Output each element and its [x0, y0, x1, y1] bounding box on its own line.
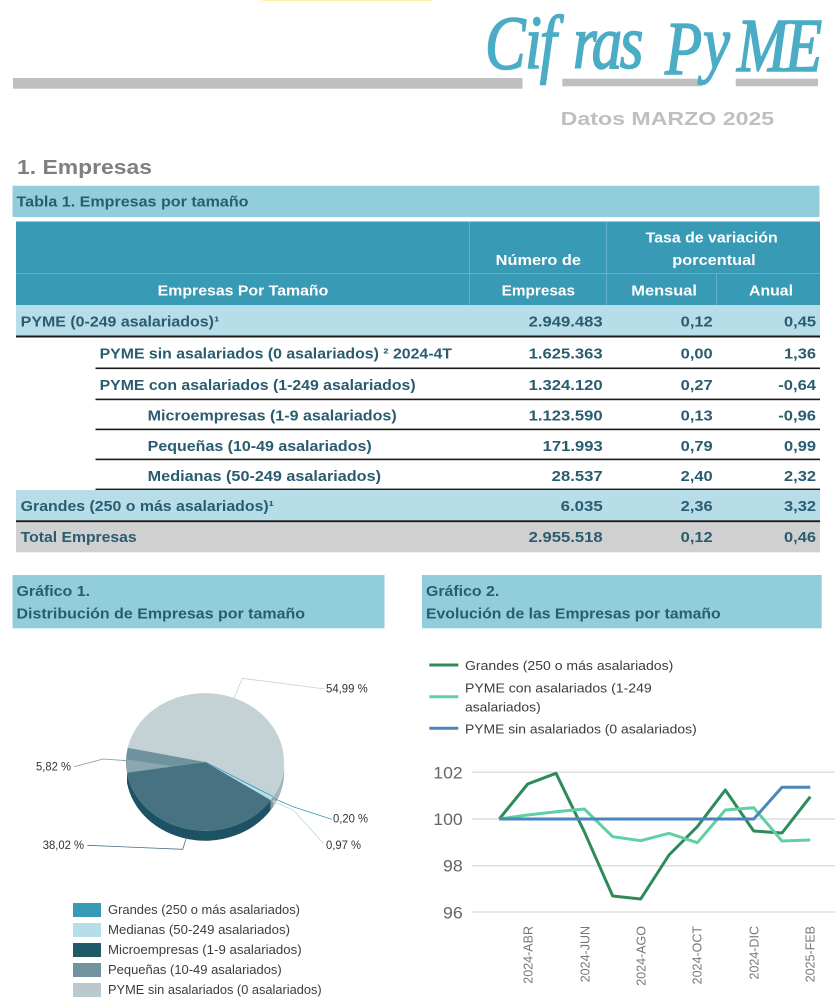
- row: PYME sin asalariados: 0,00: [681, 346, 713, 362]
- chart 2 heading: [422, 575, 822, 628]
- pie legend: Medianas (50-249 asalariados): [108, 923, 290, 937]
- row: PYME: 0,12: [681, 314, 713, 330]
- pie legend: PYME sin asalariados (0 asalariados): [108, 983, 322, 997]
- row: Pequeñas: 0,79: [681, 439, 713, 455]
- slice: Medianas: [205, 762, 273, 800]
- chart 1 heading: [12, 575, 384, 628]
- y axis labels: 102: [433, 763, 463, 782]
- table header: porcentual: [672, 253, 756, 269]
- table header: Anual: [749, 284, 793, 300]
- row: PYME: 2.949.483: [529, 314, 603, 330]
- row: Pequeñas: 0,99: [784, 439, 816, 455]
- pie depth: [127, 765, 284, 841]
- table header: Empresas: [502, 284, 575, 300]
- row: Medianas: 2,32: [784, 469, 816, 485]
- section heading: 1. Empresas: [17, 156, 152, 179]
- pie chart: [36, 678, 368, 852]
- pie labels: 0,97 %: [326, 840, 361, 852]
- slice: Pequeñas: [126, 748, 205, 773]
- row: Medianas: Medianas (50-249 asalariados): [148, 469, 381, 485]
- header: gray bars: [13, 78, 818, 89]
- table 1: [16, 222, 820, 552]
- chart 1 heading: Gráfico 1.: [16, 584, 90, 600]
- line: PYME con asalariados: [499, 808, 810, 843]
- row: Total: 2.955.518: [529, 530, 603, 546]
- x axis labels: 2024-AGO: [635, 926, 649, 986]
- table header: [16, 222, 820, 305]
- row: PYME con asalariados: 0,27: [681, 378, 713, 394]
- row: Total: 0,46: [784, 530, 816, 546]
- x axis labels: 2024-OCT: [691, 926, 705, 984]
- line chart legend: PYME con asalariados (1-249: [465, 681, 652, 695]
- row: Microempresas: -0,96: [778, 409, 816, 425]
- table title band: Tabla 1. Empresas por tamaño: [16, 195, 249, 211]
- row: Microempresas: [96, 409, 820, 430]
- pie labels: [36, 684, 368, 852]
- row: Total: 0,12: [681, 530, 713, 546]
- row: PYME con asalariados: PYME con asalariados (1-249 asalariados): [100, 378, 416, 394]
- x axis labels: 2025-FEB: [803, 926, 817, 982]
- row: Grandes: 6.035: [561, 499, 603, 515]
- title: Cifras PyME: Cifras PyME: [485, 1, 822, 91]
- leader lines: [74, 678, 332, 849]
- row: Pequeñas: [96, 439, 820, 460]
- pie labels: 38,02 %: [43, 840, 84, 852]
- row: Medianas: [96, 469, 820, 490]
- row: PYME: 0,45: [784, 314, 816, 330]
- row: Microempresas: 0,13: [681, 409, 713, 425]
- pie legend: [73, 903, 322, 997]
- x axis labels: [522, 926, 817, 986]
- row: PYME sin asalariados: PYME sin asalariados (0 asalariados) ² 2024-4T: [100, 346, 452, 362]
- table header: Empresas Por Tamaño: [158, 284, 328, 300]
- row: Microempresas: 1.123.590: [529, 409, 603, 425]
- line chart legend: Grandes (250 o más asalariados): [465, 659, 673, 673]
- y axis labels: 100: [433, 810, 463, 829]
- table title band: [12, 186, 820, 217]
- line chart legend: asalariados): [465, 701, 541, 715]
- subtitle: date: Datos MARZO 2025: [561, 108, 774, 129]
- table header: Mensual: [631, 284, 697, 300]
- line chart legend: PYME sin asalariados (0 asalariados): [465, 722, 697, 736]
- pie labels: 5,82 %: [36, 762, 71, 774]
- row: Total: Total Empresas: [21, 530, 137, 546]
- chart 1 heading: Distribución de Empresas por tamaño: [16, 606, 305, 622]
- x axis labels: 2024-DIC: [747, 926, 761, 980]
- row: Total: [16, 522, 820, 552]
- slice: Microempresas: [127, 762, 271, 831]
- line: Grandes: [499, 773, 810, 899]
- y axis labels: [433, 763, 463, 922]
- row: PYME: [16, 305, 820, 338]
- row: Pequeñas: 171.993: [543, 439, 603, 455]
- pie legend: Grandes (250 o más asalariados): [108, 903, 300, 917]
- row: Medianas: 28.537: [552, 469, 603, 485]
- row: Microempresas: Microempresas (1-9 asalariados): [148, 409, 397, 425]
- row: PYME con asalariados: 1.324.120: [529, 378, 603, 394]
- row: Grandes: 3,32: [784, 499, 816, 515]
- row: Grandes: 2,36: [681, 499, 713, 515]
- slice: Pequeñas highlight: [127, 760, 172, 773]
- pie labels: 0,20 %: [333, 814, 368, 826]
- row: PYME con asalariados: -0,64: [778, 378, 816, 394]
- row: PYME sin asalariados: 1.625.363: [529, 346, 603, 362]
- pie legend: Pequeñas (10-49 asalariados): [108, 963, 282, 977]
- row: Pequeñas: Pequeñas (10-49 asalariados): [148, 439, 372, 455]
- x axis labels: 2024-ABR: [522, 926, 536, 984]
- row: Grandes: [16, 490, 820, 522]
- pie legend: Microempresas (1-9 asalariados): [108, 943, 302, 957]
- line: PYME sin asalariados: [499, 787, 810, 819]
- row: PYME sin asalariados: 1,36: [784, 346, 816, 362]
- pie labels: 54,99 %: [326, 684, 368, 696]
- line chart: [433, 763, 835, 986]
- slice: PYME sin asalariados: [128, 693, 284, 797]
- line chart legend: [429, 659, 697, 736]
- x axis labels: 2024-JUN: [578, 926, 592, 982]
- slice: Grandes: [205, 762, 273, 797]
- row: PYME con asalariados: [96, 378, 820, 400]
- y axis labels: 98: [443, 857, 463, 876]
- row: Grandes: Grandes (250 o más asalariados)¹: [21, 499, 274, 515]
- row: PYME sin asalariados: [96, 346, 820, 369]
- table header: Número de: [496, 253, 581, 269]
- row: PYME: PYME (0-249 asalariados)¹: [21, 314, 219, 330]
- row: Medianas: 2,40: [681, 469, 713, 485]
- y axis labels: 96: [443, 903, 463, 922]
- chart 2 heading: Gráfico 2.: [426, 584, 499, 600]
- chart 2 heading: Evolución de las Empresas por tamaño: [426, 606, 721, 622]
- table header: Tasa de variación: [646, 231, 778, 247]
